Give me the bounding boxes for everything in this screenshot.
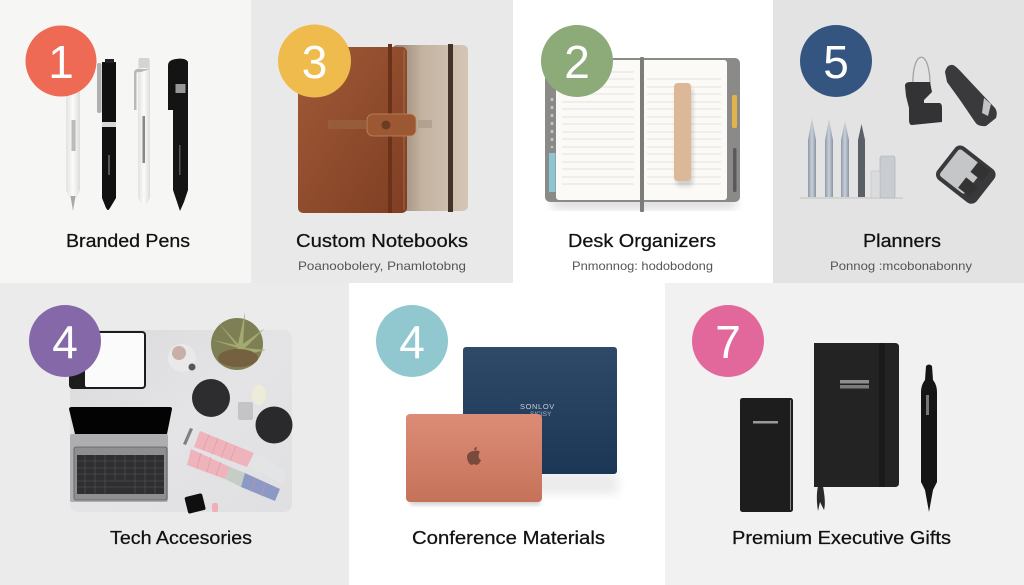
number badge 4 purple: 4 — [52, 316, 78, 368]
subtitle: Ponnog :mcobonabonny — [830, 259, 972, 273]
number badge 2 — [541, 25, 613, 97]
panel: tech accessories — [29, 305, 292, 548]
title: Tech Accesories — [110, 528, 252, 548]
icon: navy folder and laptop: SICISY — [530, 411, 552, 418]
number badge 5: 5 — [823, 36, 849, 88]
title: Desk Organizers — [568, 231, 716, 251]
number badge 2: 2 — [564, 36, 590, 88]
number badge 3 — [278, 24, 351, 98]
number badge 5 — [800, 25, 872, 97]
icon: navy folder and laptop — [406, 347, 618, 505]
icon: pens, containers and clips — [800, 57, 998, 207]
icon: leather notebooks — [298, 44, 468, 213]
panel: branded pens — [26, 26, 190, 251]
icon: apple logo — [467, 447, 481, 465]
icon: open organizer — [545, 57, 740, 212]
panel: planners — [800, 25, 998, 273]
panel: custom notebooks — [278, 24, 468, 273]
number badge 4 purple — [29, 305, 101, 377]
icon: navy folder and laptop: SONLOV — [520, 402, 555, 411]
number badge 4 teal: 4 — [399, 316, 425, 368]
subtitle: Pnmonnog: hodobodong — [572, 259, 713, 273]
panel: desk organizers — [541, 25, 740, 273]
number badge 1: 1 — [48, 36, 74, 88]
number badge 7: 7 — [715, 316, 741, 368]
number badge 4 teal — [376, 305, 448, 377]
panel: premium executive gifts — [692, 305, 951, 548]
title: Planners — [863, 231, 941, 251]
title: Premium Executive Gifts — [732, 528, 951, 548]
icon: desk flat lay — [69, 312, 292, 514]
icon: four pens — [66, 58, 188, 211]
number badge 1 — [26, 26, 96, 96]
title: Conference Materials — [412, 528, 605, 548]
subtitle: Poanoobolery, Pnamlotobng — [298, 259, 466, 273]
title: Custom Notebooks — [296, 231, 468, 251]
number badge 7 — [692, 305, 764, 377]
title: Branded Pens — [66, 231, 190, 251]
panel: conference materials — [376, 305, 618, 548]
icon: black notebooks and pen — [740, 343, 937, 512]
number badge 3: 3 — [302, 36, 327, 88]
